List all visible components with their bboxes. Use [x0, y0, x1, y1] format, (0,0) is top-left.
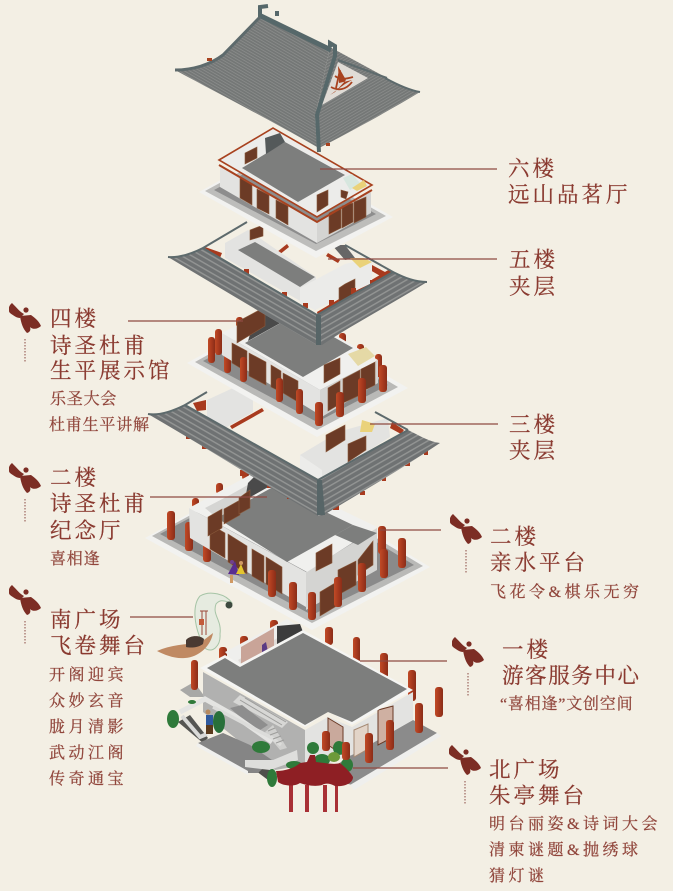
floor: 5F mezzanine — [168, 222, 427, 345]
floor: 4F Du Fu exhibition hall — [187, 303, 408, 437]
walls 4F — [222, 333, 320, 415]
front columns 1F — [322, 703, 423, 763]
floor: 2F waterside platform — [145, 468, 430, 630]
roof 4F — [222, 303, 378, 390]
rooms 3F — [207, 388, 390, 480]
label: 4F: 杜甫生平讲解 — [49, 416, 150, 434]
label: 1F: 游客服务中心 — [502, 664, 641, 688]
label: south plaza: 众妙玄音 — [49, 692, 127, 710]
back columns 1F — [191, 620, 443, 717]
icon: ribbon 2F hall — [9, 463, 41, 523]
lower ramp — [198, 733, 272, 773]
label: 2F hall: 纪念厅 — [50, 519, 124, 543]
leader lines — [128, 169, 498, 768]
walls 2F — [189, 508, 306, 607]
label: south plaza — [49, 608, 148, 788]
plants — [167, 700, 353, 787]
label: 6F — [508, 157, 631, 207]
label: 3F: 三楼 — [509, 413, 558, 437]
stair walls and dark stone — [178, 715, 208, 743]
icon: ribbon south plaza — [9, 585, 41, 645]
doors 4F — [232, 343, 375, 411]
right flight — [265, 725, 287, 750]
figure: man on stairs — [206, 710, 213, 734]
icon: ribbon north plaza — [449, 745, 481, 805]
label: 2F platform: 飞花令&棋乐无穷 — [490, 582, 642, 601]
courtyard doors 2F — [208, 490, 332, 571]
back gallery — [225, 619, 304, 668]
label: north plaza: 明台丽姿&诗词大会 — [489, 815, 661, 833]
label: north plaza: 北广场 — [489, 758, 563, 782]
rooms 5F — [225, 225, 372, 310]
floor: 1F visitor centre and ground — [167, 619, 443, 812]
label: north plaza — [489, 758, 661, 885]
label: 3F: 夹层 — [509, 439, 558, 463]
eave supports 5F — [208, 258, 375, 308]
roof 6F — [219, 128, 372, 217]
zhu pavilion — [276, 755, 353, 812]
label: 4F: 诗圣杜甫 — [50, 334, 148, 358]
gable ornament — [322, 62, 368, 105]
red beams 3F — [193, 400, 404, 482]
doors 2F — [210, 524, 373, 616]
main roof — [175, 6, 420, 152]
label: 4F: 四楼 — [50, 307, 99, 331]
label: 6F: 六楼 — [508, 157, 557, 181]
roof 2F — [189, 470, 377, 572]
label: 5F — [509, 248, 558, 299]
boat and scroll: south plaza stage — [157, 593, 232, 658]
label: 2F hall: 喜相逢 — [50, 550, 100, 568]
label: 1F — [500, 638, 641, 713]
label: 5F: 五楼 — [509, 248, 558, 272]
room details 6F — [245, 133, 367, 212]
label: 4F: 生平展示馆 — [50, 359, 173, 383]
label: 1F: 一楼 — [502, 638, 551, 662]
label: 2F platform — [490, 525, 642, 601]
courtyard doors 4F — [237, 307, 375, 383]
label: 3F — [509, 413, 558, 463]
floor: 6F tea hall — [199, 128, 393, 258]
label: 2F hall: 二楼 — [50, 466, 99, 490]
label: 2F hall — [50, 466, 148, 568]
walls 1F — [203, 672, 305, 770]
label: north plaza: 朱亭舞台 — [489, 784, 587, 808]
label: 6F: 远山品茗厅 — [508, 183, 631, 207]
glass doors 1F — [328, 706, 393, 757]
label: south plaza: 胧月清影 — [49, 717, 127, 736]
label: south plaza: 飞卷舞台 — [50, 634, 148, 658]
slab 4F — [187, 313, 408, 437]
icon: ribbon 4F — [9, 303, 41, 363]
label: south plaza: 传奇通宝 — [49, 770, 127, 788]
label: 4F — [49, 307, 173, 434]
roof 1F — [200, 630, 413, 727]
label: 4F: 乐圣大会 — [50, 390, 117, 408]
upper flight — [233, 695, 288, 728]
label: north plaza: 猜灯谜 — [489, 867, 548, 885]
mezzanine eaves 5F — [168, 222, 427, 345]
label: 1F: “喜相逢”文创空间 — [500, 695, 633, 713]
front columns 4F — [240, 357, 387, 426]
label: south plaza: 武动江阁 — [49, 744, 127, 762]
label: south plaza: 南广场 — [50, 608, 124, 632]
walls 6F — [220, 165, 317, 243]
figures: dancers — [228, 560, 245, 583]
balustrades — [180, 699, 272, 742]
floor: 3F mezzanine — [148, 388, 440, 516]
slab 6F — [199, 150, 393, 258]
label: south plaza: 开阁迎宾 — [49, 666, 127, 684]
back columns 4F — [208, 317, 382, 377]
red beams 5F — [205, 244, 392, 316]
doors 6F — [240, 178, 366, 234]
ground slab — [180, 682, 441, 790]
back columns 2F — [167, 468, 406, 568]
label: 2F hall: 诗圣杜甫 — [50, 492, 148, 516]
slab 2F — [145, 470, 430, 630]
front columns 2F — [268, 549, 388, 620]
icon: ribbon 1F — [452, 637, 484, 697]
stairs — [178, 695, 298, 783]
eave supports 3F — [167, 421, 428, 510]
label: 5F: 夹层 — [509, 275, 558, 299]
icon: ribbon 2F platform — [450, 514, 482, 574]
label: 2F platform: 亲水平台 — [490, 551, 588, 575]
label: north plaza: 清柬谜题&抛绣球 — [489, 841, 641, 859]
mezzanine eaves 3F — [148, 392, 440, 516]
label: 2F platform: 二楼 — [490, 525, 539, 549]
